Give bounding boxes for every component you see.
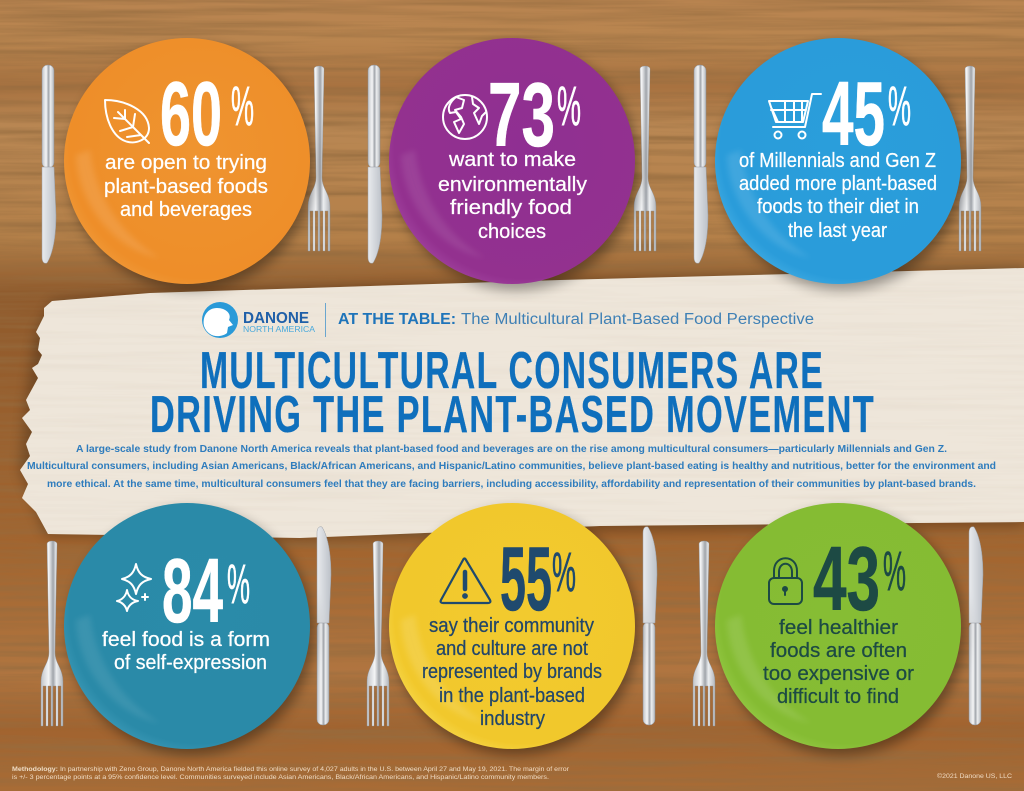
text: are open to trying: are open to trying xyxy=(105,152,267,174)
logo: Danone North America: DANONE xyxy=(243,310,309,327)
text: feel food is a form of self-expression: feel food is a form xyxy=(102,629,270,651)
text: feel healthier foods are often: difficult to find xyxy=(777,686,899,708)
icon: leaf xyxy=(105,100,149,143)
panel: purple plate 73%: % xyxy=(557,74,581,137)
text: feel healthier foods are often: too expensive or xyxy=(763,663,914,685)
panel: orange plate 60% xyxy=(64,38,314,290)
methodology footnote: Methodology: In partnership with Zeno Group, Danone North America fielded this online survey of 4,027 adults in the U.S. between April 27 and May 19, 2021. The margin of error xyxy=(12,767,569,773)
header: At the Table: The Multicultural Plant-Based Food Perspective xyxy=(461,311,814,328)
logo: Danone North America: NORTH AMERICA xyxy=(243,324,315,334)
title xyxy=(150,342,875,444)
icon: warning triangle xyxy=(441,558,490,603)
text: of Millennials and Gen Z: the last year xyxy=(788,220,887,242)
panel: blue plate 45%: % xyxy=(888,74,911,137)
text: say their community and culture: say their community xyxy=(429,615,594,637)
logo: Danone North America xyxy=(202,302,315,338)
intro paragraph: more ethical. At the same time, multicultural consumers feel that they are facing barriers, including accessibility, affordability and representation of their communities by plant-based brands. xyxy=(47,479,976,490)
panel: teal plate 84% xyxy=(64,503,314,755)
panel: yellow plate 55%: % xyxy=(552,540,576,603)
text: want to make environmentally friendly food choices: environmentally xyxy=(438,174,587,196)
stat: 60%: 60 xyxy=(160,64,222,165)
intro paragraph xyxy=(27,444,996,490)
text: are open to trying: plant-based foods xyxy=(104,176,268,198)
text: of Millennials and Gen Z: of Millennials and Gen Z xyxy=(739,150,936,172)
text: of Millennials and Gen Z: added more plant-based xyxy=(739,173,937,195)
panel: green plate 43%: % xyxy=(883,539,906,602)
text: want to make environmentally friendly food choices: choices xyxy=(478,221,546,243)
text: say their community and culture: and culture are not xyxy=(436,638,588,660)
text: say their community and culture: industry xyxy=(480,708,545,730)
stat: 55%: 55 xyxy=(500,529,552,630)
methodology footnote xyxy=(12,767,569,781)
header: At the Table: AT THE TABLE: xyxy=(338,311,456,328)
text: of Millennials and Gen Z: foods to their diet in xyxy=(757,196,919,218)
copyright: ©2021 Danone US, LLC xyxy=(937,773,1013,780)
text: are open to trying: and beverages xyxy=(120,199,252,221)
panel: teal plate 84%: % xyxy=(227,552,250,615)
icon: sparkles xyxy=(117,564,151,611)
cutlery: top row xyxy=(42,65,981,263)
panel: purple plate 73% xyxy=(389,38,639,290)
text: feel food is a form of self-expression: of self-expression xyxy=(114,652,267,674)
panel: green plate 43% xyxy=(715,503,965,755)
intro paragraph: A large-scale study from Danone North America reveals that plant-based food and beverages are on the rise among multicultural consumers—particularly Millennials and Gen Z. xyxy=(76,444,947,455)
panel: blue plate 45% xyxy=(715,38,965,290)
divider line xyxy=(325,303,326,337)
icon: padlock xyxy=(769,558,802,604)
text: feel healthier foods are often: foods are often xyxy=(770,640,907,662)
intro paragraph: Multicultural consumers, including Asian Americans, Black/African Americans, and Hispanic/Latino communities, believe plant-based eating is healthy and nutritious, better for the environment and xyxy=(27,461,996,472)
text: say their community and culture: in the plant-based xyxy=(439,685,585,707)
icon: globe xyxy=(443,95,487,139)
stat: 73%: 73 xyxy=(488,65,555,166)
icon: shopping cart xyxy=(769,94,821,138)
stat: 45%: 45 xyxy=(822,64,885,165)
methodology footnote: is +/- 3 percentage points at a 95% confidence level. Communities surveyed include Asian Americans, Black/African Americans, and Hispanic/Latino community members. xyxy=(12,775,549,781)
text: feel healthier foods are often: feel healthier xyxy=(779,617,898,639)
cutlery: bottom row xyxy=(41,527,983,726)
stat: 43%: 43 xyxy=(813,529,880,630)
panel: yellow plate 55% xyxy=(389,503,639,755)
stat: 84%: 84 xyxy=(162,541,223,642)
text: want to make environmentally friendly food choices: want to make xyxy=(448,149,576,171)
painted banner background xyxy=(14,268,1024,540)
text: want to make environmentally friendly food choices: friendly food xyxy=(450,197,572,219)
text: say their community and culture: represented by brands xyxy=(422,661,602,683)
panel: orange plate 60%: % xyxy=(231,74,254,137)
